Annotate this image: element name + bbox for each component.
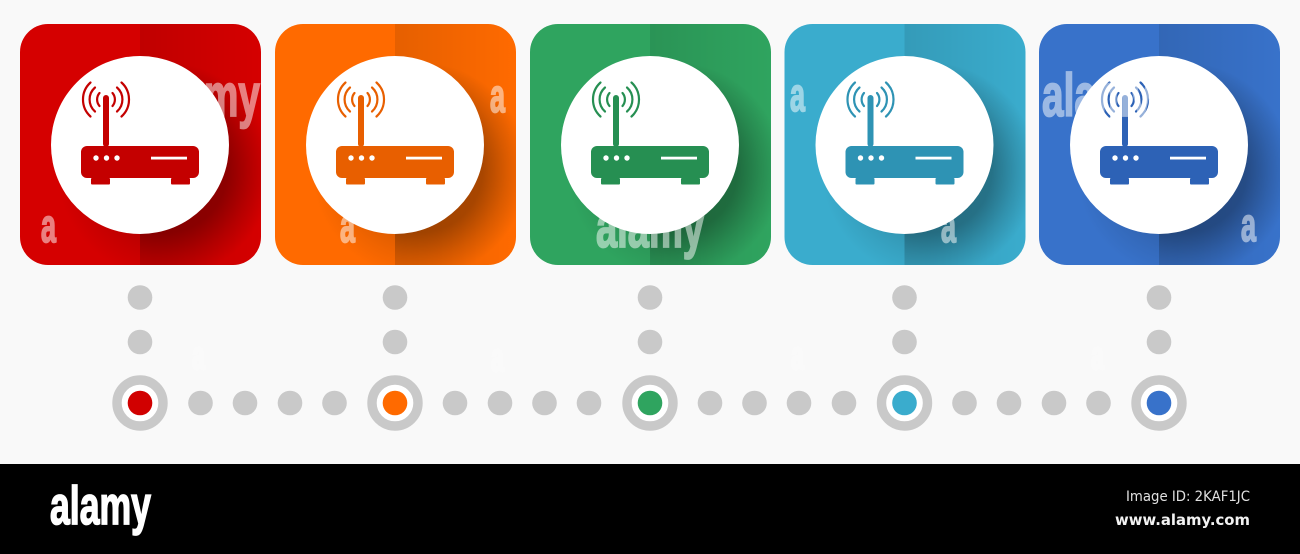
footer logo: alamy xyxy=(50,476,151,536)
tile background with shadow and circle xyxy=(275,24,528,278)
watermark overlays: a xyxy=(192,334,205,378)
icon: green wifi router xyxy=(591,82,709,184)
tile background with shadow and circle xyxy=(530,24,783,278)
timeline marker: red xyxy=(117,380,163,426)
tile background with shadow and circle xyxy=(1039,24,1292,278)
watermark overlays: a xyxy=(491,336,504,380)
watermark overlays: a xyxy=(790,68,805,121)
website url: www.alamy.com xyxy=(1115,511,1250,529)
vertical connector dots xyxy=(128,285,1171,354)
timeline marker: teal xyxy=(882,380,928,426)
image id: Image ID: 2KAF1JC xyxy=(1126,489,1250,505)
icon: red wifi router xyxy=(81,82,199,184)
watermark overlays xyxy=(41,62,1256,380)
watermark overlays: alamy xyxy=(1042,62,1152,129)
watermark overlays: a xyxy=(941,199,956,252)
icon: blue wifi router xyxy=(1100,82,1218,184)
watermark overlays: alamy xyxy=(596,195,704,260)
panel: blue router tile xyxy=(1039,24,1292,278)
watermark overlays: a xyxy=(490,69,505,122)
timeline marker: orange xyxy=(372,380,418,426)
timeline marker: blue xyxy=(1136,380,1182,426)
icon: teal wifi router xyxy=(846,82,964,184)
watermark overlays: a xyxy=(791,334,804,378)
panel: orange router tile xyxy=(275,24,528,278)
tile background with shadow and circle xyxy=(20,24,273,278)
footer band xyxy=(0,464,1300,554)
watermark overlays: a xyxy=(1091,334,1104,378)
watermark overlays: a xyxy=(340,199,355,252)
panel: teal router tile xyxy=(784,24,1038,278)
icon: orange wifi router xyxy=(336,82,454,184)
panel: red router tile xyxy=(20,24,273,278)
tile background with shadow and circle xyxy=(784,24,1038,278)
watermark overlays: a xyxy=(1241,198,1256,251)
timeline marker: green xyxy=(627,380,673,426)
watermark overlays: a xyxy=(41,199,56,252)
panel: green router tile xyxy=(530,24,783,278)
watermark overlays: alamy xyxy=(150,62,260,129)
horizontal timeline dots xyxy=(188,391,1111,415)
